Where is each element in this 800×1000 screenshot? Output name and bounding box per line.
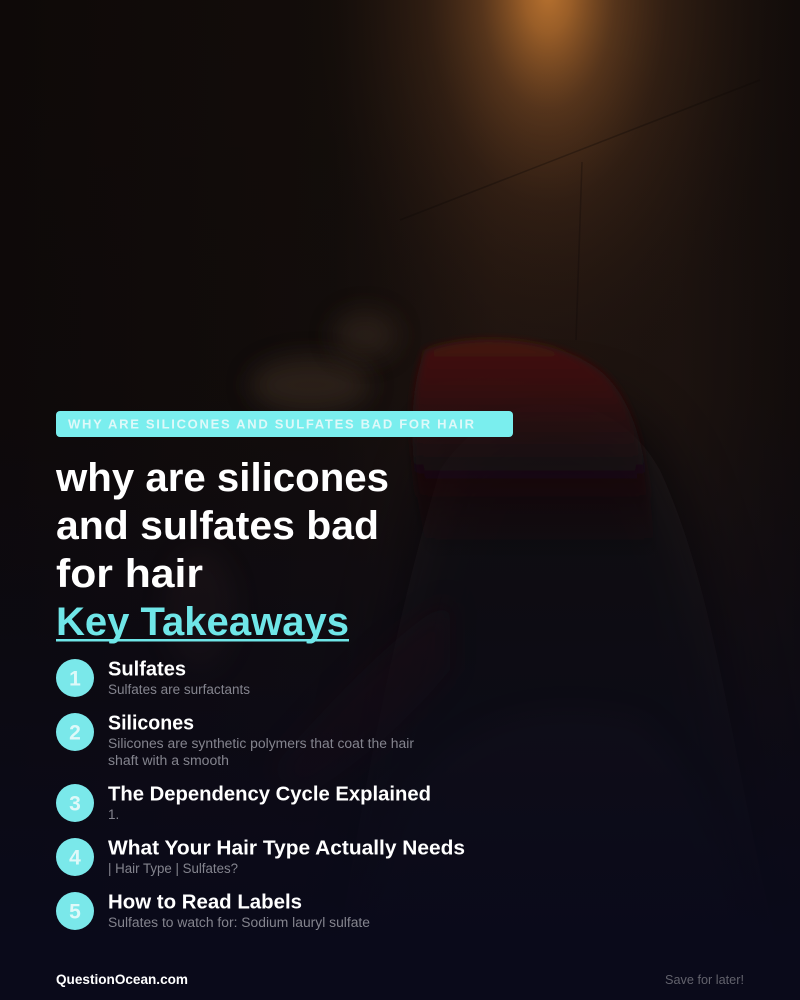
subtitle: key takeaways: Key Takeaways [56, 600, 349, 644]
smoke [250, 311, 397, 413]
item 2: silicones [56, 712, 415, 768]
footer save note: Save for later! [665, 972, 744, 987]
item 3: dependency cycle: 3 [69, 792, 81, 816]
item 4: hair type: What Your Hair Type Actually Needs [108, 838, 465, 860]
takeaway list [56, 658, 465, 930]
tag pill: WHY ARE SILICONES AND SULFATES BAD FOR HAIR [68, 416, 475, 432]
title: why are silicones [55, 456, 389, 500]
item 2: silicones: Silicones are synthetic polymers that coat the hair [108, 736, 415, 751]
item 5: reading labels [56, 892, 370, 930]
item 2: silicones: Silicones [108, 712, 194, 734]
tag pill [56, 411, 513, 437]
red hair [412, 339, 655, 560]
figure silhouette [330, 402, 790, 1000]
item 4: hair type: 4 [69, 846, 81, 870]
item 1: sulfates: 1 [69, 668, 81, 690]
footer brand: QuestionOcean.com [56, 971, 188, 987]
item 2: silicones: 2 [69, 722, 81, 744]
item 3: dependency cycle: The Dependency Cycle Explained [108, 784, 431, 806]
item 1: sulfates [56, 658, 250, 697]
item 5: reading labels: Sulfates to watch for: Sodium lauryl sulfate [108, 915, 370, 930]
item 5: reading labels: How to Read Labels [108, 892, 302, 914]
item 4: hair type: | Hair Type | Sulfates? [108, 861, 238, 876]
item 3: dependency cycle: 1. [108, 807, 119, 822]
hand [165, 550, 235, 670]
item 3: dependency cycle [56, 784, 431, 822]
item 1: sulfates: Sulfates are surfactants [108, 682, 250, 697]
title: and sulfates bad [56, 504, 379, 548]
item 4: hair type [56, 838, 465, 876]
title [55, 456, 389, 596]
item 2: silicones: shaft with a smooth [108, 753, 229, 768]
item 5: reading labels: 5 [69, 900, 81, 924]
item 1: sulfates: Sulfates [108, 658, 186, 680]
shirt [350, 711, 750, 950]
title: for hair [56, 552, 203, 596]
